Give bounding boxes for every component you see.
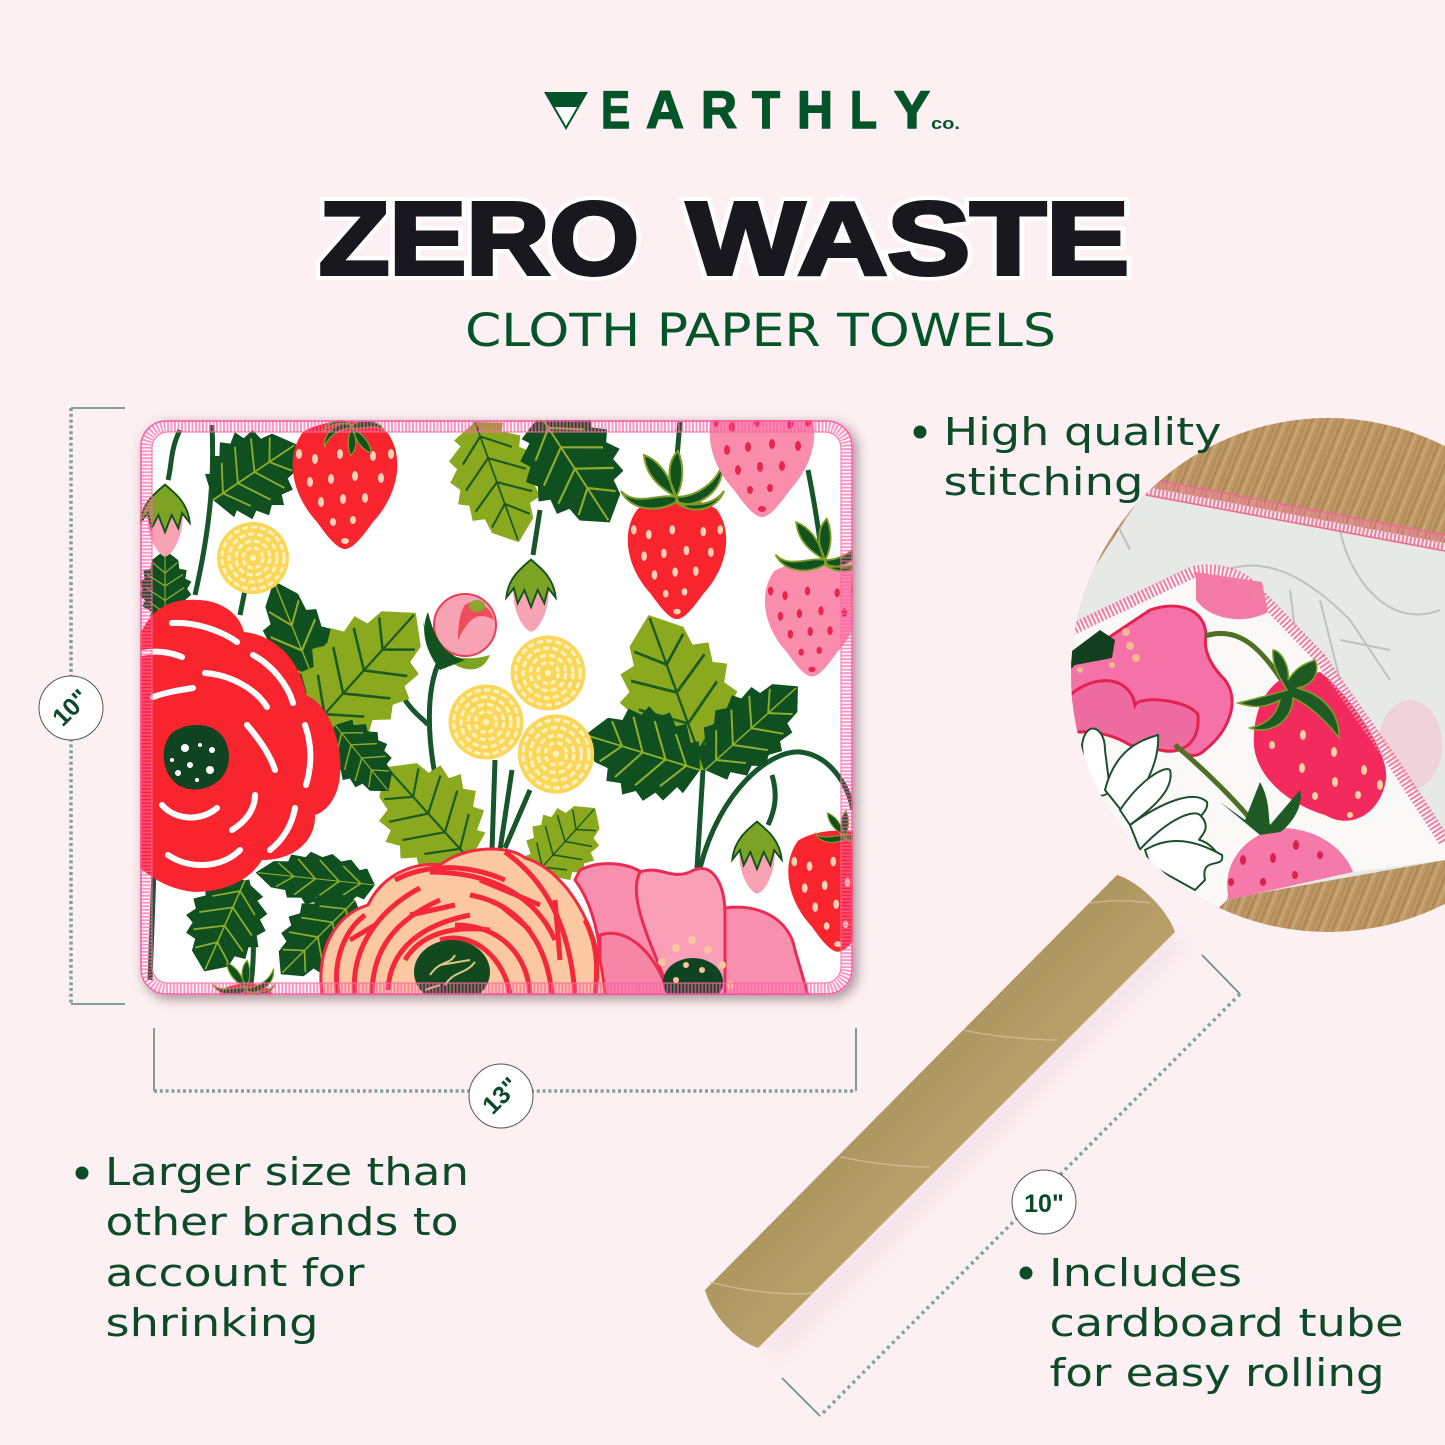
dimension: towel height: 10" [47, 684, 95, 732]
bullet: larger size: Larger size than [105, 1150, 469, 1194]
red strawberry in photo [1254, 672, 1386, 821]
title: ZERO WASTE: WASTE [687, 181, 1129, 296]
dimension: tube length [782, 955, 1240, 1416]
title: ZERO WASTE: ZERO [319, 181, 639, 296]
logo wordmark: L [850, 81, 877, 140]
back of towel [1060, 487, 1445, 900]
title: ZERO WASTE: ZERO [319, 181, 639, 296]
dimension: towel width [154, 1028, 856, 1128]
bullet: cardboard tube: cardboard tube [1050, 1301, 1404, 1345]
subtitle: CLOTH PAPER TOWELS [465, 304, 1056, 357]
bullet: stitching: High quality [944, 410, 1222, 454]
calyx [1238, 650, 1339, 738]
flower centre [1071, 630, 1115, 669]
red rose [140, 600, 340, 892]
leaves [139, 389, 823, 999]
strawberries [213, 390, 888, 1054]
bullet: stitching [914, 410, 1222, 504]
stems [150, 422, 853, 990]
white daisy [1082, 729, 1222, 890]
tube shadow [770, 940, 1175, 1350]
title: ZERO WASTE [319, 181, 1129, 296]
bullet: cardboard tube [1020, 1251, 1404, 1395]
bullet: cardboard tube: for easy rolling [1050, 1351, 1384, 1395]
logo wordmark: R [701, 81, 737, 140]
logo: Earthly Co. [544, 81, 960, 140]
dimension: towel width: 13" [477, 1072, 525, 1120]
bullet: larger size: account for [106, 1251, 365, 1295]
towel shadow [144, 424, 857, 999]
pink strawberry in photo [1227, 828, 1353, 900]
back hem stitching [1147, 487, 1445, 543]
ranunculus flower [321, 849, 605, 1004]
cardboard tube [705, 875, 1175, 1348]
logo wordmark: E [601, 81, 630, 140]
logo wordmark [601, 81, 960, 140]
title: ZERO WASTE: WASTE [687, 181, 1129, 296]
logo wordmark: H [797, 81, 833, 140]
front hem stitching [1060, 571, 1445, 842]
wood table [1060, 410, 1445, 940]
rosebud [422, 594, 496, 670]
buds [140, 485, 782, 894]
front of towel [1071, 566, 1445, 908]
dimension: towel height [39, 408, 125, 1004]
icon: triangle [544, 92, 588, 130]
pink poppy flower [575, 864, 808, 1006]
stems in photo [1175, 633, 1285, 825]
logo wordmark: Y [894, 81, 930, 140]
bullet: larger size: other brands to [106, 1200, 458, 1244]
bullet: cardboard tube: Includes [1049, 1251, 1242, 1295]
spiral seams [710, 901, 1150, 1294]
yellow craspedia balls [217, 522, 594, 794]
bullet: larger size [76, 1150, 469, 1345]
stitched hem [141, 421, 852, 994]
panel: floral cloth towel [140, 420, 853, 995]
dimension: tube length: 10" [1024, 1190, 1064, 1218]
photo: stitching close-up [1060, 410, 1445, 940]
logo wordmark: T [752, 81, 780, 140]
bullet: stitching: stitching [944, 460, 1144, 504]
bullet: larger size: shrinking [106, 1301, 318, 1345]
pink flower [1060, 606, 1232, 755]
logo wordmark: co. [931, 114, 960, 133]
logo wordmark: A [646, 81, 684, 140]
faded print showing through [1118, 526, 1440, 680]
small pink berry at hem [1196, 572, 1268, 619]
